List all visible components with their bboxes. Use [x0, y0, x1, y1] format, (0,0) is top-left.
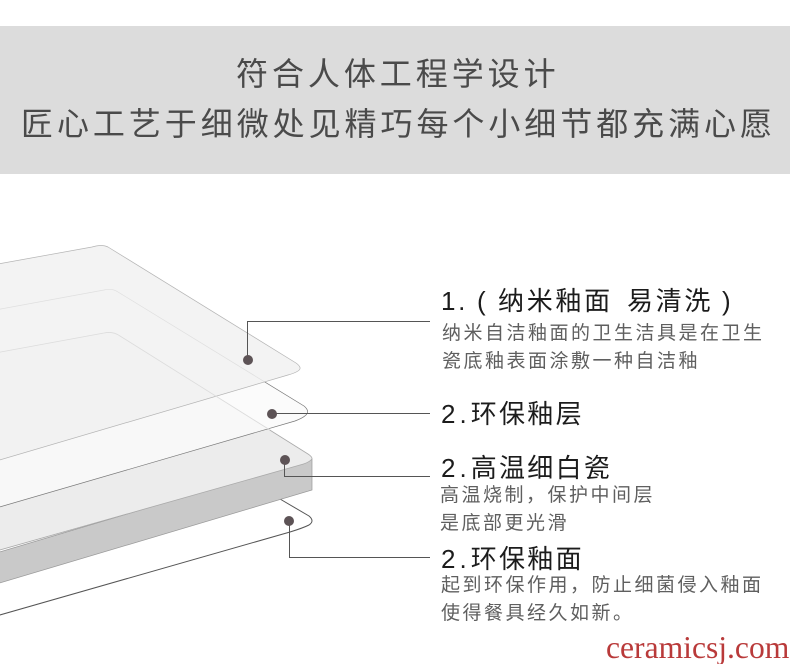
- label 3 text line 1: 高温烧制，保护中间层: [440, 485, 655, 506]
- label 1 heading: 纳米釉面: [498, 286, 613, 316]
- label 2 heading: 2.环保釉层: [441, 399, 584, 429]
- watermark: ceramicsj.com: [606, 630, 789, 664]
- leader line 4: [284, 516, 430, 558]
- label 1 heading: [441, 286, 733, 316]
- title line 1: 符合人体工程学设计: [236, 56, 560, 92]
- label 1 text line 1: 纳米自洁釉面的卫生洁具是在卫生: [442, 323, 765, 344]
- label 1 heading: 易清洗: [627, 286, 713, 316]
- header band: [0, 26, 790, 174]
- inner line on top plate: [0, 332, 270, 430]
- middle glaze layer: [0, 289, 308, 508]
- title line 2: 匠心工艺于细微处见精巧每个小细节都充满心愿: [21, 106, 776, 142]
- label 4 text line 2: 使得餐具经久如新。: [441, 603, 635, 624]
- label 1 heading: 1.: [441, 286, 468, 316]
- leader line 3: [280, 455, 430, 476]
- label 4 heading: 2.环保釉面: [441, 544, 584, 574]
- label 3 heading: 2.高温细白瓷: [441, 452, 612, 482]
- label 3 text line 2: 是底部更光滑: [440, 513, 569, 534]
- leader line 1: [243, 322, 430, 365]
- top nano glaze layer: [0, 246, 300, 460]
- ceramic body layer: [0, 332, 312, 584]
- bottom glaze layer: [0, 499, 312, 616]
- label 4 text line 1: 起到环保作用，防止细菌侵入釉面: [441, 575, 764, 596]
- label 1 heading: ): [722, 286, 733, 316]
- label 1 text line 2: 瓷底釉表面涂敷一种自洁釉: [442, 351, 700, 372]
- leader line 2: [267, 409, 430, 419]
- label 1 heading: (: [477, 286, 488, 316]
